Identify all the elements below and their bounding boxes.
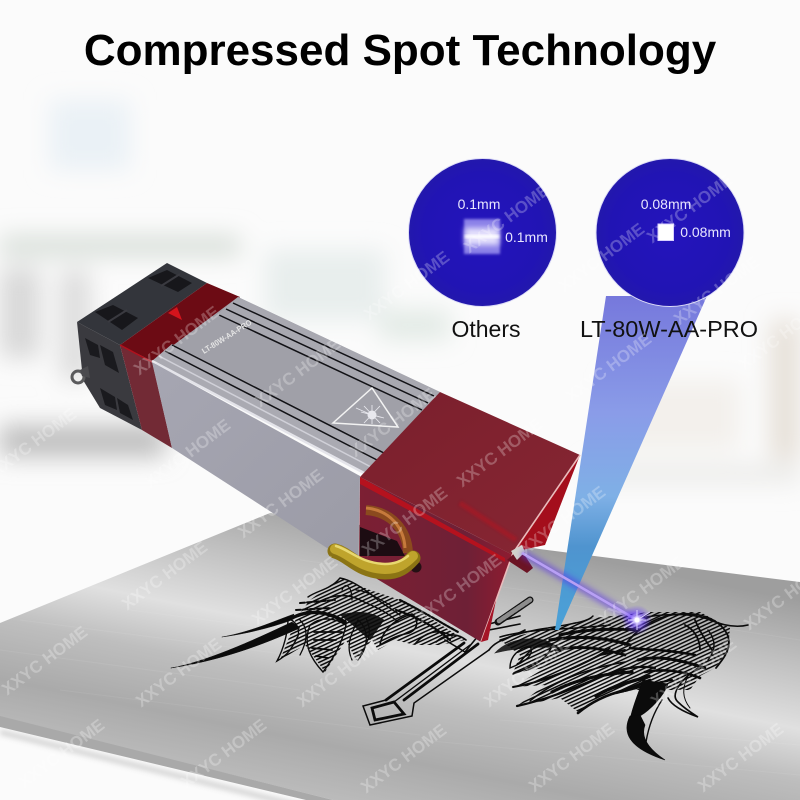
watermarks: XXYC HOME: [358, 483, 451, 560]
watermarks: XXYC HOME: [460, 180, 553, 257]
watermarks: XXYC HOME: [480, 634, 573, 711]
watermarks: XXYC HOME: [595, 552, 688, 629]
copper heat pipe: [366, 508, 408, 553]
side dimension: 0.08mm: [680, 224, 731, 240]
sword engraving: [363, 600, 530, 725]
left wing engraving: [171, 578, 466, 672]
label: LT-80W-AA-PRO: [580, 316, 758, 342]
title: Compressed Spot Technology: [84, 26, 717, 75]
watermarks: XXYC HOME: [234, 465, 327, 542]
watermarks: XXYC HOME: [412, 550, 505, 627]
grey body side: [152, 362, 360, 568]
spot comparison: others: [408, 158, 556, 342]
watermarks: XXYC HOME: [647, 634, 740, 711]
watermarks: XXYC HOME: [694, 719, 787, 796]
watermarks: XXYC HOME: [293, 634, 386, 711]
violet laser beam: [522, 553, 652, 635]
sharp square spot: [658, 224, 674, 240]
watermarks: XXYC HOME: [248, 552, 341, 629]
front red shroud: [359, 392, 580, 642]
watermarks: XXYC HOME: [0, 622, 91, 699]
bright reflection on shroud: [460, 503, 516, 540]
heat pipe recess: [360, 527, 405, 556]
blue beam cone to magnified spot: [555, 296, 707, 630]
magnified spot disc: [408, 158, 556, 306]
watermarks: XXYC HOME: [132, 634, 225, 711]
grey body top with ribs: [152, 297, 440, 474]
top dimension: 0.08mm: [641, 196, 691, 212]
laser lens nozzle: [507, 545, 533, 573]
model name on body: LT-80W-AA-PRO: [200, 318, 253, 356]
watermarks: XXYC HOME: [118, 537, 211, 614]
mounting ring: [72, 366, 90, 383]
laser focus spark: [622, 605, 652, 635]
watermarks: XXYC HOME: [555, 219, 648, 296]
engraved metal plate: [0, 513, 800, 800]
watermarks: [0, 170, 800, 797]
watermarks: XXYC HOME: [670, 252, 763, 329]
top dimension: 0.1mm: [458, 196, 500, 212]
watermarks: XXYC HOME: [516, 482, 609, 559]
plate front edge: [0, 716, 333, 800]
watermarks: XXYC HOME: [346, 384, 439, 461]
watermarks: XXYC HOME: [15, 715, 108, 792]
watermarks: XXYC HOME: [141, 415, 234, 492]
watermarks: XXYC HOME: [177, 715, 270, 792]
watermarks: XXYC HOME: [357, 720, 450, 797]
label: Others: [451, 316, 521, 342]
rear fan housing: [72, 263, 207, 430]
watermarks: XXYC HOME: [562, 329, 655, 406]
side dimension: 0.1mm: [505, 229, 548, 245]
watermarks: XXYC HOME: [453, 414, 546, 491]
watermarks: XXYC HOME: [360, 247, 453, 324]
plate edge shadow: [0, 732, 300, 800]
brass tube: [335, 546, 422, 572]
engraved artwork: [171, 578, 748, 760]
watermarks: XXYC HOME: [130, 302, 223, 379]
laser module: [72, 263, 580, 642]
rear red band: [120, 283, 240, 448]
watermarks: XXYC HOME: [251, 334, 344, 411]
right wing engraving: [495, 612, 748, 760]
watermarks: XXYC HOME: [525, 719, 618, 796]
watermarks: XXYC HOME: [643, 170, 736, 247]
magnified spot disc: [596, 158, 744, 306]
blurred square spot: [464, 219, 500, 254]
laser warning icon: [333, 388, 398, 427]
spot comparison: LT-80W-AA-PRO: [580, 158, 758, 342]
